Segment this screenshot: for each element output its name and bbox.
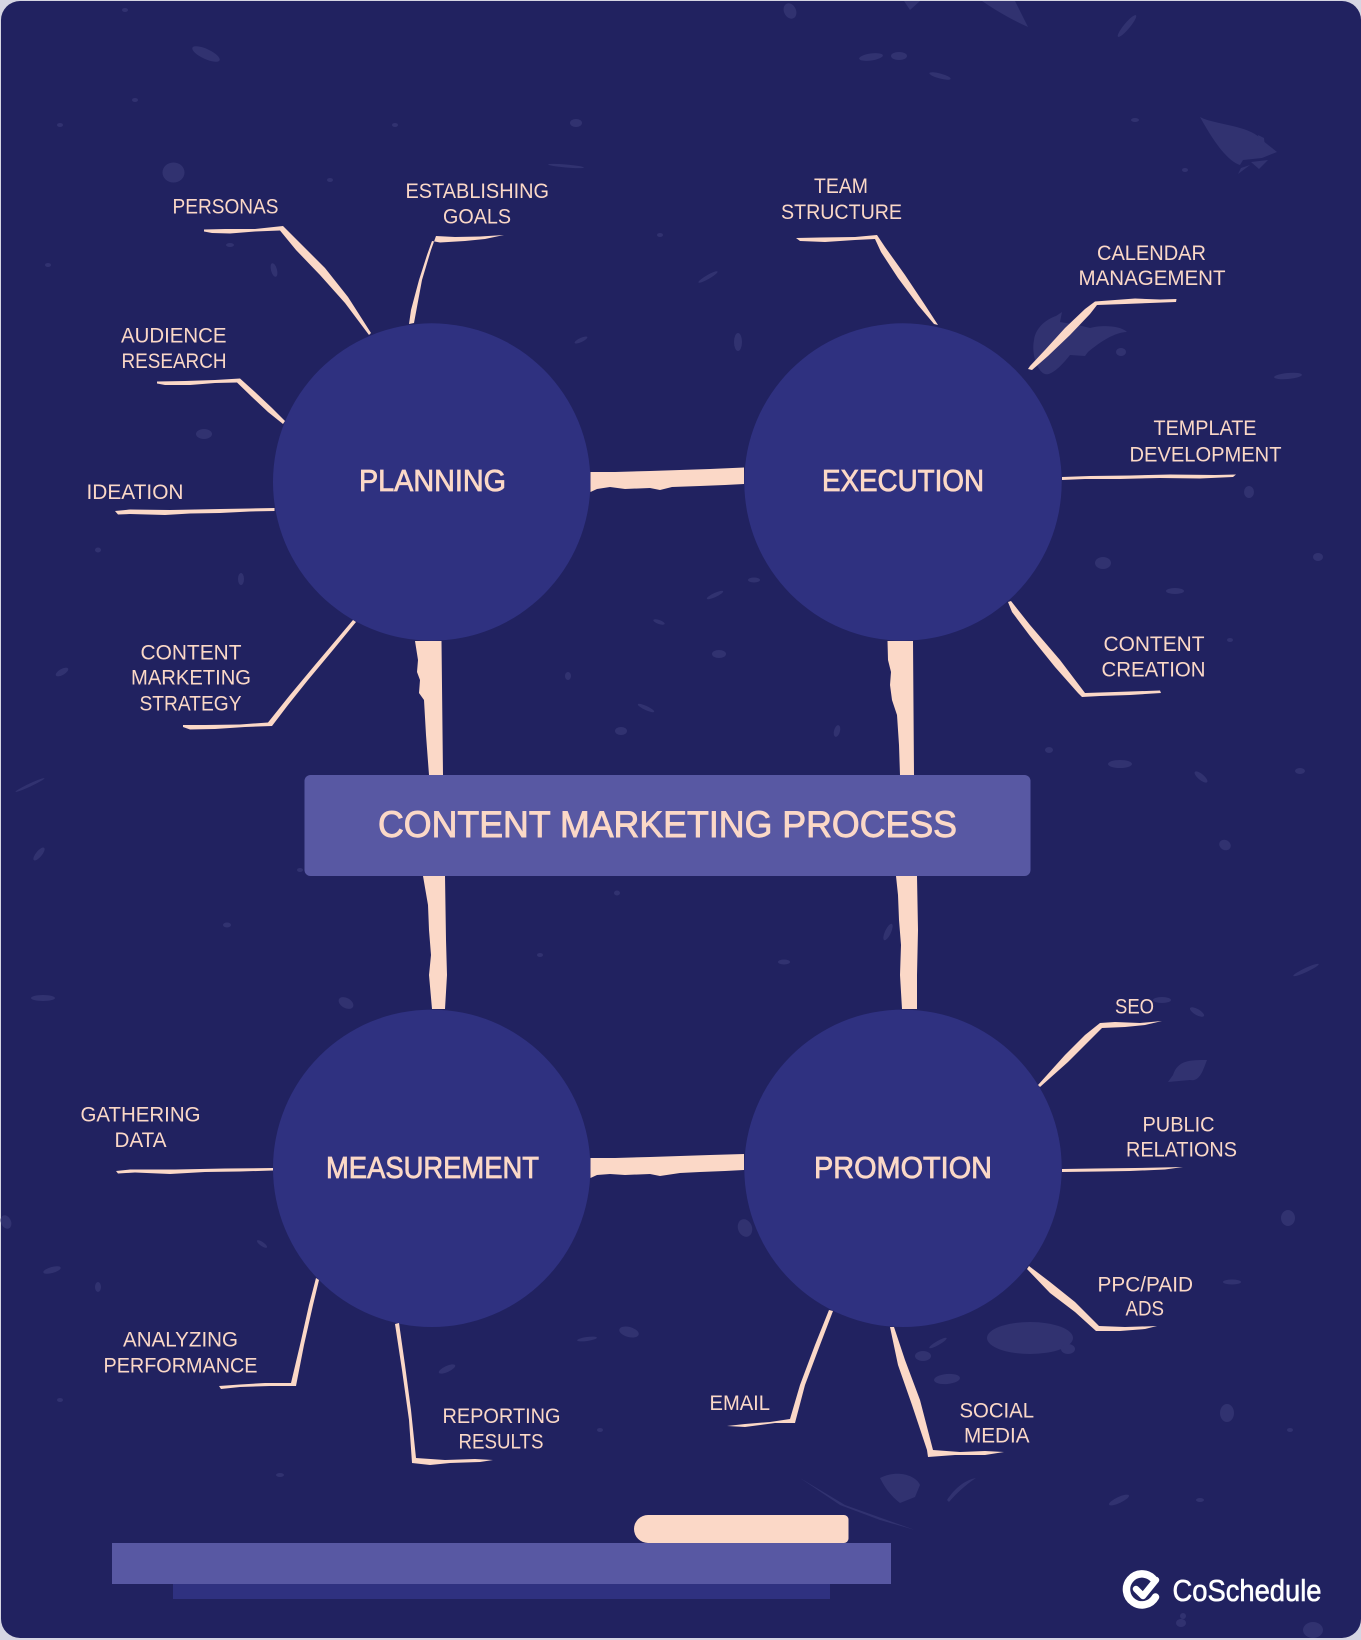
branch: establishing goals: ESTABLISHING: [406, 180, 549, 203]
circle: measurement: MEASUREMENT: [326, 1150, 539, 1185]
branch: reporting results: [395, 1323, 560, 1465]
connector: measurement to promotion: [590, 1154, 744, 1178]
circle: promotion: [744, 1010, 1062, 1327]
branch: ppc/paid ads: PPC/PAID: [1098, 1273, 1193, 1296]
branch: ppc/paid ads: [1027, 1266, 1193, 1331]
branch: audience research: RESEARCH: [122, 350, 226, 373]
logo: CoSchedule: [1126, 1573, 1322, 1608]
branch: team structure: STRUCTURE: [781, 201, 902, 224]
circle: planning: [273, 323, 590, 641]
branch: content creation: CREATION: [1102, 658, 1206, 681]
banner title: CONTENT MARKETING PROCESS: [378, 804, 957, 845]
branch: seo: SEO: [1115, 995, 1154, 1018]
connector: planning to execution: [590, 468, 744, 492]
branch: audience research: [121, 324, 285, 424]
branch: calendar management: [1028, 242, 1226, 370]
branch: analyzing performance: [104, 1278, 319, 1389]
branch: ideation: IDEATION: [86, 481, 184, 504]
branch: audience research: AUDIENCE: [121, 324, 226, 347]
branch: gathering data: [80, 1103, 273, 1174]
branch: social media: SOCIAL: [960, 1399, 1034, 1422]
connector: banner to measurement: [423, 876, 447, 1009]
logo: CoSchedule: CoSchedule: [1172, 1573, 1322, 1608]
branch: gathering data: DATA: [114, 1129, 166, 1152]
decorative book stack: lower shelf: [173, 1583, 830, 1599]
branch: reporting results: REPORTING: [442, 1405, 560, 1428]
branch: social media: [890, 1327, 1034, 1457]
circle: measurement: [273, 1010, 590, 1327]
branch: public relations: RELATIONS: [1126, 1138, 1237, 1161]
branch: seo: [1038, 995, 1162, 1087]
circle: promotion: PROMOTION: [814, 1150, 992, 1185]
branch: team structure: [781, 175, 938, 325]
branch: public relations: [1062, 1113, 1237, 1172]
icon: check badge: [1126, 1574, 1156, 1605]
central banner: [304, 775, 1030, 876]
branch: establishing goals: [406, 180, 549, 324]
branch: content creation: CONTENT: [1104, 633, 1205, 656]
decorative book stack: upper shelf: [112, 1543, 891, 1584]
branch: ideation: [86, 481, 274, 515]
branch: calendar management: MANAGEMENT: [1078, 267, 1226, 290]
branch: public relations: PUBLIC: [1142, 1113, 1214, 1136]
circle: execution: EXECUTION: [822, 463, 984, 498]
circle: execution: [744, 323, 1062, 641]
circle: planning: PLANNING: [359, 463, 506, 498]
branch: email: EMAIL: [710, 1392, 770, 1415]
branch: analyzing performance: PERFORMANCE: [104, 1354, 258, 1377]
branch: analyzing performance: ANALYZING: [123, 1328, 238, 1351]
branch: content creation: [1008, 601, 1206, 697]
connector: execution to banner: [888, 641, 914, 775]
branch: content marketing strategy: [131, 620, 356, 730]
branch: personas: [172, 195, 371, 335]
connector: planning to banner: [415, 641, 443, 775]
decorative book stack: peach pill: [634, 1515, 848, 1543]
branch: calendar management: CALENDAR: [1097, 242, 1206, 265]
branch: email: [710, 1310, 833, 1427]
branch: team structure: TEAM: [814, 175, 868, 198]
branch: content marketing strategy: CONTENT: [140, 641, 242, 664]
connector: banner to promotion: [896, 876, 918, 1009]
branch: reporting results: RESULTS: [458, 1430, 544, 1453]
branch: social media: MEDIA: [964, 1424, 1030, 1447]
branch: content marketing strategy: STRATEGY: [140, 692, 242, 715]
branch: content marketing strategy: MARKETING: [131, 666, 251, 689]
branch: establishing goals: GOALS: [443, 205, 511, 228]
branch: ppc/paid ads: ADS: [1126, 1297, 1164, 1320]
branch: template development: TEMPLATE: [1154, 417, 1256, 440]
branch: gathering data: GATHERING: [80, 1103, 200, 1126]
branch: template development: DEVELOPMENT: [1130, 443, 1282, 466]
branch: personas: PERSONAS: [172, 195, 278, 218]
branch: template development: [1062, 417, 1282, 480]
